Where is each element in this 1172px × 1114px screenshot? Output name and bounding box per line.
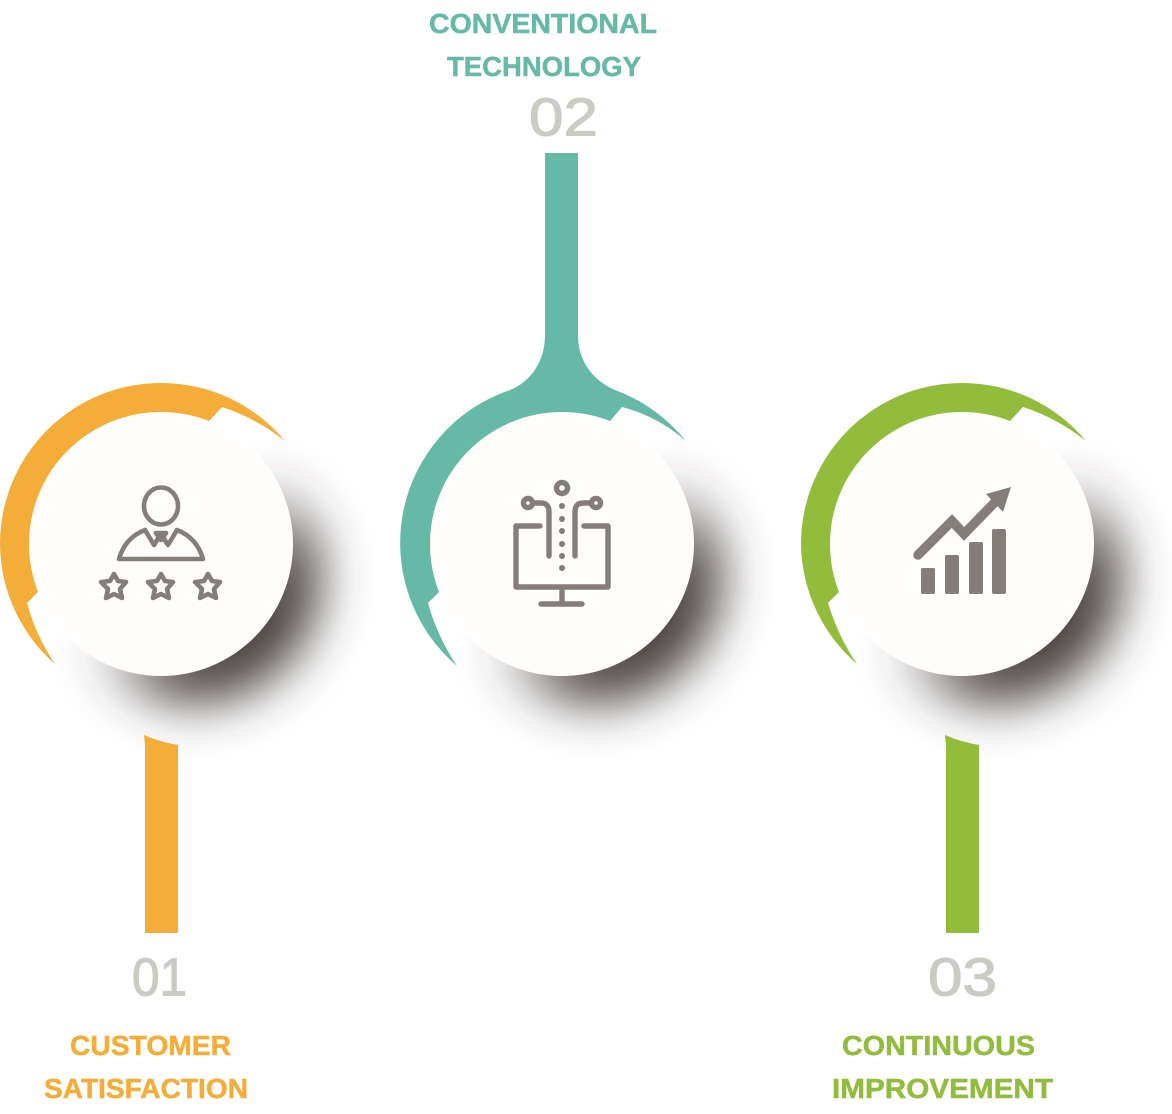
circle shadow [866, 448, 1122, 704]
white circle [29, 412, 293, 676]
ring arc: green [801, 383, 1086, 664]
heading: customer satisfaction [44, 1030, 248, 1104]
heading: customer satisfaction: CUSTOMER [70, 1030, 231, 1061]
icon: monitor with circuit nodes [516, 482, 608, 604]
heading: conventional technology: TECHNOLOGY [447, 51, 641, 82]
icon: rising bar chart with arrow [918, 487, 1011, 594]
heading: conventional technology: CONVENTIONAL [429, 8, 657, 39]
number 02: 02 [529, 88, 598, 148]
white circle [830, 412, 1094, 676]
ring arc and stem: teal [400, 153, 686, 666]
ring arc: orange [0, 383, 285, 664]
heading: continuous improvement [832, 1030, 1053, 1104]
panel: conventional technology [400, 8, 722, 704]
icon: person with three stars [101, 488, 220, 598]
number 03: 03 [928, 948, 997, 1008]
panel: continuous improvement [801, 383, 1122, 1104]
heading: conventional technology [429, 8, 657, 82]
heading: continuous improvement: IMPROVEMENT [832, 1073, 1053, 1104]
white circle [430, 412, 694, 676]
number 01: 01 [132, 948, 187, 1008]
stem: customer satisfaction [144, 735, 178, 933]
heading: continuous improvement: CONTINUOUS [842, 1030, 1035, 1061]
circle shadow [65, 448, 321, 704]
heading: customer satisfaction: SATISFACTION [44, 1073, 248, 1104]
stem: continuous improvement [945, 735, 979, 933]
circle shadow [466, 448, 722, 704]
panel: customer satisfaction [0, 383, 321, 1104]
